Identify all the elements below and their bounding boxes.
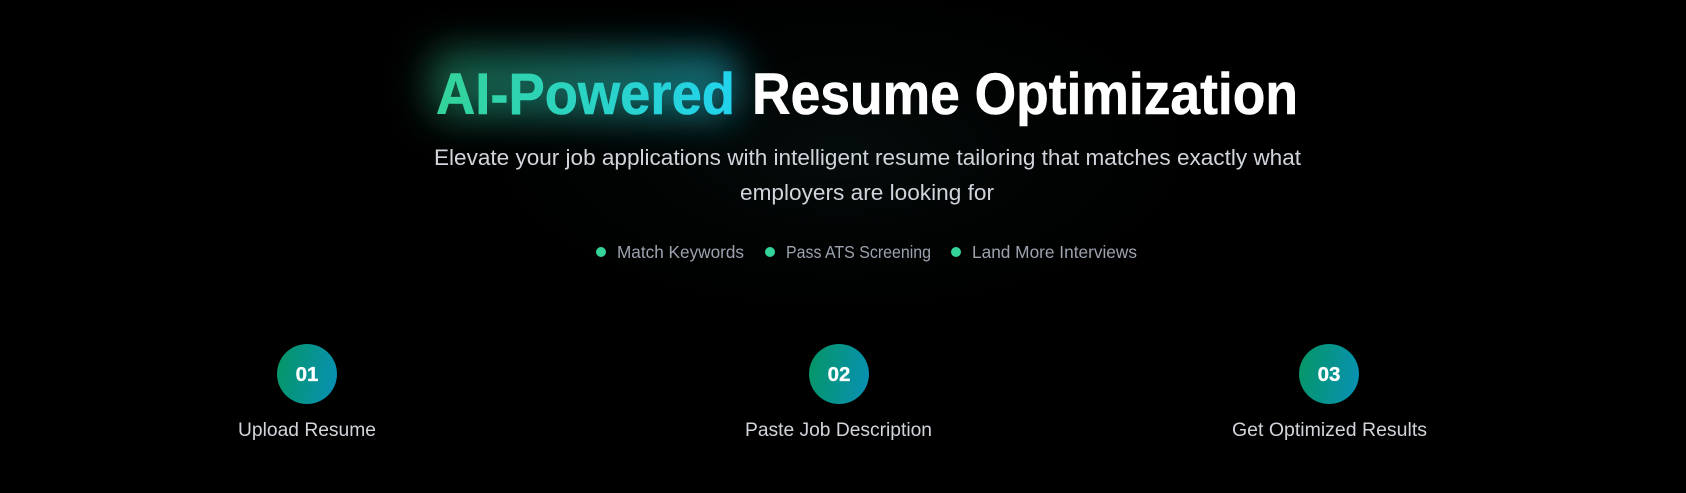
bullet: pass ATS screening: Pass ATS Screening: [786, 242, 931, 262]
step 2: [745, 344, 932, 441]
step 2 badge: 02: [828, 363, 850, 386]
title glow: [430, 50, 738, 118]
title: [436, 62, 1298, 127]
title: AI-Powered: [436, 62, 735, 127]
subtitle: employers are looking for: [740, 180, 995, 205]
step 3 label: Get Optimized Results: [1232, 420, 1427, 441]
step 3: [1232, 344, 1427, 441]
step 3 badge: [1299, 344, 1359, 404]
title: Resume Optimization: [752, 62, 1298, 127]
step 1: [238, 344, 376, 441]
step 2 badge: [809, 344, 869, 404]
step 3 badge: 03: [1318, 363, 1340, 386]
step 2 label: Paste Job Description: [745, 420, 932, 441]
subtitle: Elevate your job applications with intelligent resume tailoring that matches exactly what: [434, 145, 1302, 170]
step 1 badge: 01: [296, 363, 318, 386]
feature bullets: [596, 242, 1137, 262]
bullet: match keywords: Match Keywords: [617, 242, 744, 262]
subtitle: [434, 145, 1302, 205]
bullet: land more interviews: Land More Interviews: [972, 242, 1137, 262]
step 1 label: Upload Resume: [238, 420, 376, 441]
